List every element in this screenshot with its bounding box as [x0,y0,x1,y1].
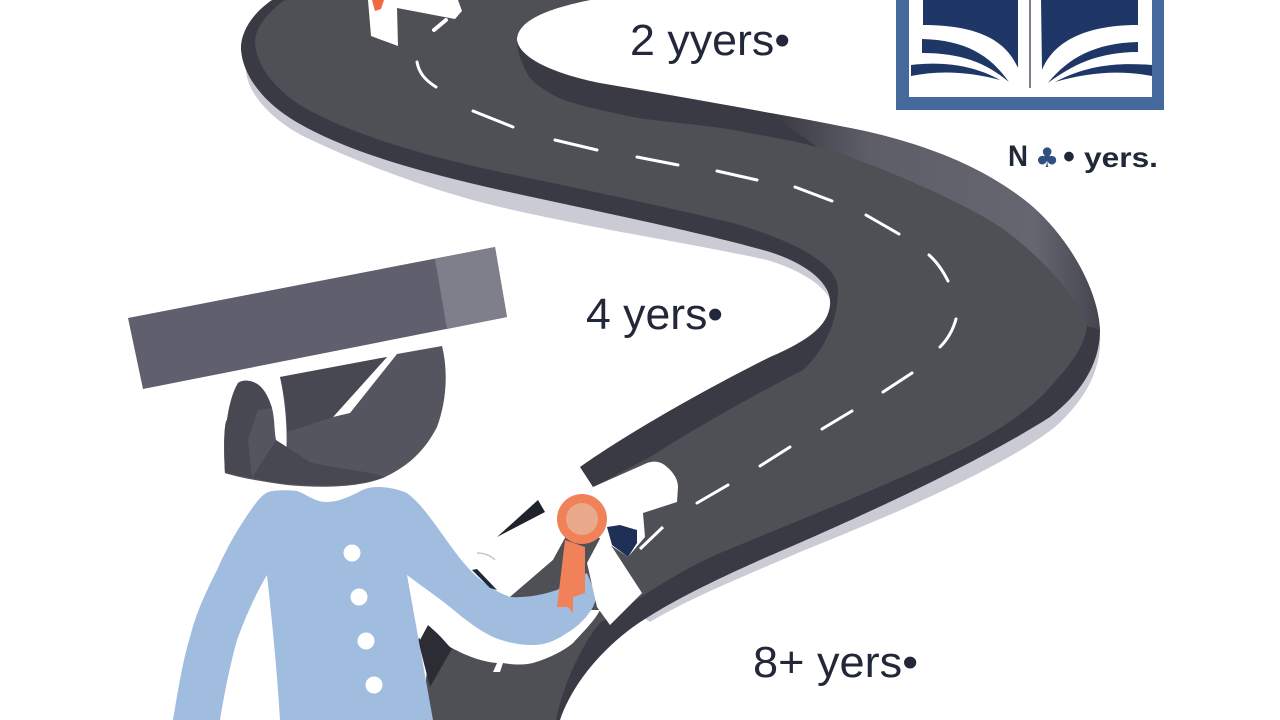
mortarboard cap [128,247,507,389]
white halo under arm [407,575,600,672]
black sliver [497,500,545,537]
rosette centre [566,503,598,535]
book frame [896,0,1164,110]
diploma roll [575,462,678,557]
book pages [911,0,1152,83]
label: N years: • [1063,138,1075,176]
road asphalt surface [255,0,1087,720]
gown buttons [344,544,382,694]
open book icon [896,0,1164,110]
graduate figure [128,247,600,720]
grey fold mark [477,553,495,560]
small road dash near diploma [640,527,663,549]
white ribbon tail [587,533,642,625]
light blue gown [173,487,597,720]
road light upper rim [770,113,1100,330]
road drop shadow [246,50,1100,622]
label: 8+ years: 8+ yers• [753,638,918,687]
road centre dashes [417,62,956,503]
book spine [1029,0,1031,88]
label: N years: yers. [1084,142,1158,173]
dark triangle behind figure [418,625,453,687]
rolled diploma with ribbon [472,462,678,625]
label: N years: N [1008,140,1028,173]
label: N years [1008,138,1158,176]
label: N years: ♣ [1035,143,1059,174]
hair [224,346,446,487]
road dark edge base [241,0,1100,720]
navy diploma shadow [607,525,637,557]
label: 2 years: 2 yyers• [630,16,790,65]
white scroll at top of road [368,0,462,46]
orange rosette tail [557,540,585,613]
orange rosette [557,494,607,544]
dark strip near arm [472,569,497,590]
label: 4 years: 4 yers• [586,290,723,339]
winding road [241,0,1100,720]
